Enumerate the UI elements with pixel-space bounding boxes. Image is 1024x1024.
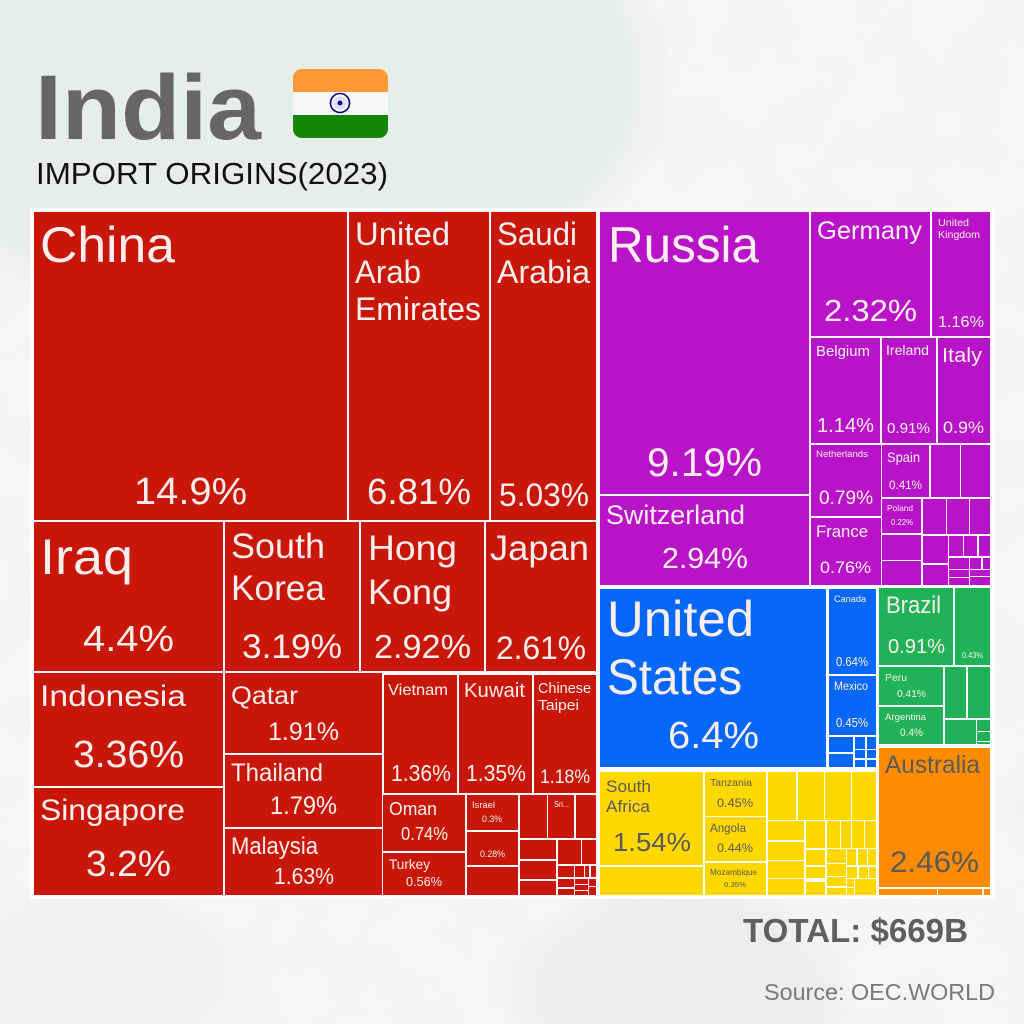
Saudi Arabia: Saudi: [497, 216, 577, 252]
Indonesia: 3.36%: [73, 734, 184, 776]
Chinese Taipei: Taipei: [538, 698, 579, 714]
panel: Oceania (orange): [879, 748, 990, 895]
China: [34, 212, 347, 520]
Germany: 2.32%: [824, 293, 917, 328]
Israel: [467, 795, 518, 830]
treemap chart: [30, 208, 995, 899]
Oman: 0.74%: [401, 824, 448, 844]
unlabeled country 0.43%: 0.43%: [962, 650, 983, 660]
South Korea: [225, 522, 359, 671]
unlabeled country 0.43%: [955, 588, 990, 665]
Netherlands: [811, 445, 881, 516]
Japan: Japan: [490, 529, 589, 568]
Kuwait: [459, 675, 532, 793]
Turkey: Turkey: [389, 857, 430, 872]
Mexico: Mexico: [834, 681, 868, 693]
Iraq: [34, 522, 223, 671]
Germany: [811, 212, 930, 336]
Belgium: 1.14%: [817, 415, 874, 437]
United Arab Emirates: Arab: [355, 254, 421, 290]
small yellow cells: [600, 772, 876, 895]
Kuwait: 1.35%: [466, 760, 526, 786]
China: 14.9%: [134, 471, 247, 513]
United States: 6.4%: [668, 715, 759, 757]
South Africa: [600, 772, 703, 865]
Belgium: Belgium: [816, 343, 870, 360]
Netherlands: 0.79%: [819, 488, 873, 509]
United States: States: [607, 649, 742, 705]
Russia: [600, 212, 809, 494]
Italy: 0.9%: [943, 418, 984, 437]
icon: India flag: [293, 69, 388, 138]
Sri Lanka: [548, 795, 574, 838]
Malaysia: Malaysia: [231, 833, 319, 860]
United Arab Emirates: Emirates: [355, 291, 481, 327]
Chinese Taipei: 1.18%: [540, 767, 590, 788]
United Kingdom: Kingdom: [938, 229, 980, 241]
South Africa: South: [606, 777, 651, 796]
small green cells: [945, 667, 990, 744]
Australia: 2.46%: [890, 846, 979, 879]
Turkey: [383, 853, 465, 895]
Tanzania: Tanzania: [710, 777, 752, 789]
Singapore: [34, 788, 223, 895]
South Africa: 1.54%: [613, 827, 691, 857]
United Kingdom: [932, 212, 990, 336]
United Kingdom: 1.16%: [938, 314, 984, 331]
Peru: Peru: [885, 673, 907, 684]
total value: TOTAL: $669B: [743, 912, 968, 949]
Hong Kong: Kong: [368, 573, 452, 612]
Singapore: Singapore: [40, 794, 185, 827]
Poland: 0.22%: [891, 518, 913, 527]
Ireland: Ireland: [886, 343, 929, 358]
Switzerland: 2.94%: [662, 543, 748, 575]
United Arab Emirates: United: [355, 216, 450, 252]
Iraq: Iraq: [40, 529, 133, 585]
Saudi Arabia: Arabia: [497, 254, 590, 290]
Brazil: Brazil: [886, 592, 941, 619]
panel: Africa (yellow): [600, 772, 876, 895]
South Africa: Africa: [606, 797, 651, 816]
Spain: [882, 445, 929, 497]
Germany: Germany: [817, 217, 923, 245]
small purple cells: [882, 445, 990, 585]
South Korea: Korea: [231, 569, 326, 608]
Kuwait: Kuwait: [464, 680, 525, 702]
Japan: 2.61%: [496, 630, 586, 666]
Malaysia: [225, 829, 382, 895]
Angola: Angola: [710, 823, 747, 835]
France: France: [816, 522, 868, 541]
Angola: 0.44%: [717, 841, 753, 855]
Chinese Taipei: Chinese: [538, 681, 591, 697]
Spain: Spain: [887, 449, 920, 465]
Mozambique: [705, 863, 766, 895]
panel: Asia (red): [34, 212, 596, 895]
Argentina: 0.4%: [900, 727, 923, 739]
subtitle: IMPORT ORIGINS(2023): [36, 156, 388, 191]
Tanzania: 0.45%: [717, 796, 753, 810]
source note: Source: OEC.WORLD: [764, 979, 995, 1005]
Spain: 0.41%: [889, 478, 922, 492]
Italy: Italy: [942, 345, 982, 367]
panel: Europe (purple): [600, 212, 990, 585]
Poland: [882, 499, 921, 533]
Argentina: [879, 707, 943, 744]
United States: [600, 589, 826, 767]
small red cells: [467, 795, 596, 895]
unlabeled country 0.28%: [467, 832, 518, 865]
United Kingdom: United: [938, 217, 969, 229]
Ireland: [882, 338, 936, 443]
Indonesia: [34, 673, 223, 786]
Mozambique: Mozambique: [710, 867, 757, 877]
panel: North America (blue): [600, 589, 876, 767]
Israel: 0.3%: [482, 814, 503, 825]
Israel: Israel: [472, 800, 495, 811]
Iraq: 4.4%: [83, 618, 174, 659]
Hong Kong: 2.92%: [374, 628, 471, 665]
Switzerland: [600, 496, 809, 585]
Mozambique: 0.35%: [724, 880, 746, 889]
Malaysia: 1.63%: [274, 863, 334, 889]
Chinese Taipei: [534, 675, 596, 793]
Qatar: Qatar: [231, 682, 298, 710]
Poland: Poland: [887, 503, 913, 513]
unlabeled country 0.28%: 0.28%: [480, 849, 506, 860]
panel: South America (green): [879, 588, 990, 744]
Qatar: 1.91%: [268, 718, 339, 746]
small blue cells: [829, 737, 876, 767]
Sri Lanka: Sri...: [554, 800, 569, 809]
China: China: [40, 217, 175, 273]
Argentina: Argentina: [885, 712, 927, 723]
Indonesia: Indonesia: [40, 680, 186, 713]
Netherlands: Netherlands: [816, 449, 868, 460]
Thailand: 1.79%: [270, 792, 337, 820]
South Korea: South: [231, 527, 325, 566]
Oman: [383, 795, 465, 851]
France: 0.76%: [820, 558, 871, 577]
Qatar: [225, 673, 382, 753]
Russia: Russia: [608, 217, 759, 273]
Canada: 0.64%: [836, 655, 868, 669]
Saudi Arabia: [491, 212, 596, 520]
Peru: 0.41%: [897, 688, 926, 700]
Russia: 9.19%: [647, 441, 762, 485]
Australia: Australia: [885, 751, 980, 779]
small orange cells: [879, 889, 990, 895]
Hong Kong: [361, 522, 484, 671]
Angola: [705, 817, 766, 861]
Oman: Oman: [389, 799, 437, 819]
Vietnam: [384, 675, 457, 793]
South Korea: 3.19%: [242, 628, 342, 666]
title: India: [35, 57, 262, 159]
Peru: [879, 667, 943, 705]
Japan: [486, 522, 596, 671]
Belgium: [811, 338, 880, 443]
Vietnam: Vietnam: [388, 682, 448, 699]
Italy: [938, 338, 990, 443]
Brazil: [879, 588, 953, 665]
Mexico: 0.45%: [836, 716, 868, 730]
Thailand: [225, 755, 382, 827]
Canada: [829, 589, 876, 674]
Switzerland: Switzerland: [606, 500, 745, 530]
Tanzania: [705, 772, 766, 816]
Thailand: Thailand: [231, 759, 323, 787]
Saudi Arabia: 5.03%: [499, 477, 589, 513]
Turkey: 0.56%: [406, 874, 442, 889]
Singapore: 3.2%: [86, 843, 171, 884]
United Arab Emirates: 6.81%: [367, 471, 471, 512]
United Arab Emirates: [349, 212, 489, 520]
Australia: [879, 748, 990, 887]
Mexico: [829, 676, 876, 735]
France: [811, 518, 881, 585]
Brazil: 0.91%: [888, 636, 945, 658]
Ireland: 0.91%: [887, 420, 930, 437]
Canada: Canada: [834, 594, 867, 605]
Hong Kong: Hong: [368, 529, 457, 568]
Vietnam: 1.36%: [391, 760, 451, 786]
United States: United: [607, 591, 754, 647]
